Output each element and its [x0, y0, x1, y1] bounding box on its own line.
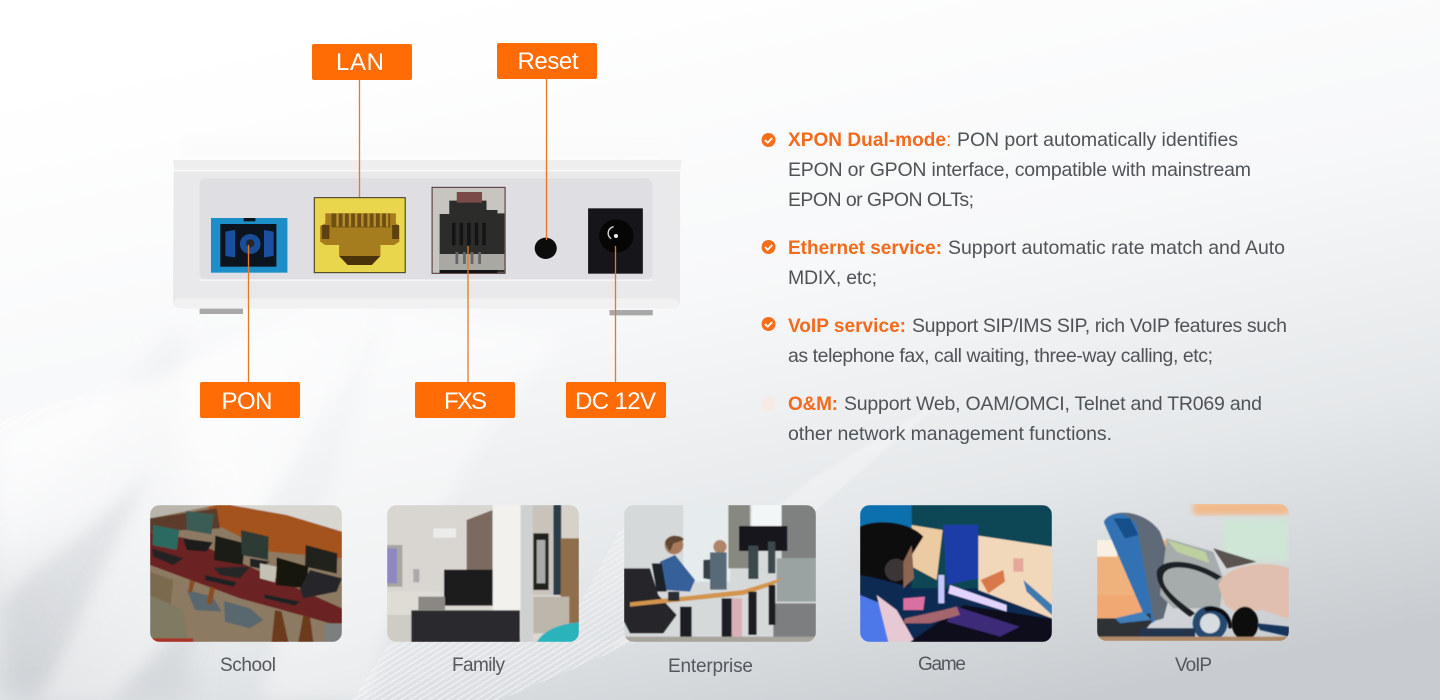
label: FXS — [415, 382, 515, 418]
photo: VoIP — [1097, 502, 1289, 641]
label: FXS: FXS — [444, 388, 487, 415]
caption: Game: Game — [918, 654, 966, 675]
photo: Enterprise — [624, 505, 816, 642]
feature: O&M: Support Web, OAM/OMCI, Telnet and TR069 and — [844, 393, 1262, 415]
feature: XPON Dual-mode — [762, 129, 1251, 211]
reset pinhole — [535, 238, 557, 259]
callout lines — [248, 79, 616, 382]
photo: Family — [387, 505, 579, 642]
feature: O&M: other network management functions. — [788, 423, 1112, 445]
device lid — [173, 160, 682, 171]
feature: XPON Dual-mode: : — [946, 130, 951, 151]
label: Reset — [497, 43, 597, 79]
label: PON: PON — [222, 388, 272, 415]
feature: O&M — [762, 393, 1262, 445]
label: LAN: LAN — [336, 49, 384, 76]
feature: Ethernet service: MDIX, etc; — [788, 267, 877, 289]
device body — [173, 171, 680, 308]
LAN port — [314, 198, 405, 273]
feature: XPON Dual-mode: PON port automatically identifies — [957, 129, 1238, 151]
feature: XPON Dual-mode: XPON Dual-mode — [788, 130, 946, 151]
feature: VoIP service: Support SIP/IMS SIP, rich VoIP features such — [912, 315, 1287, 337]
device feet — [200, 309, 653, 315]
photo: Game — [860, 505, 1052, 642]
feature: VoIP service: VoIP service: — [788, 316, 906, 337]
feature: Ethernet service: Ethernet service: — [788, 238, 942, 259]
feature: Ethernet service: Support automatic rate match and Auto — [948, 237, 1285, 259]
caption: Enterprise: Enterprise — [668, 656, 753, 677]
device: rear panel of ONU — [173, 138, 682, 315]
photo: School — [150, 505, 342, 642]
label: LAN — [312, 44, 412, 80]
label: PON — [200, 382, 300, 418]
feature: XPON Dual-mode: EPON or GPON OLTs; — [788, 189, 974, 211]
label: DC 12V: DC 12V — [575, 388, 656, 415]
DC power jack — [588, 208, 643, 274]
PON port — [211, 218, 287, 273]
feature: XPON Dual-mode: EPON or GPON interface, compatible with mainstream — [788, 159, 1251, 181]
FXS port — [432, 187, 505, 273]
feature: Ethernet service — [762, 237, 1285, 289]
feature: O&M: O&M: — [788, 394, 838, 415]
caption: Family: Family — [452, 655, 506, 676]
feature list — [762, 129, 1287, 445]
label: DC 12V — [566, 382, 666, 418]
label: Reset: Reset — [518, 48, 579, 75]
feature: VoIP service: as telephone fax, call waiting, three-way calling, etc; — [788, 345, 1213, 367]
caption: School: School — [220, 655, 276, 676]
recessed port panel — [200, 178, 652, 280]
caption: VoIP: VoIP — [1175, 655, 1212, 676]
feature: VoIP service — [762, 315, 1287, 367]
